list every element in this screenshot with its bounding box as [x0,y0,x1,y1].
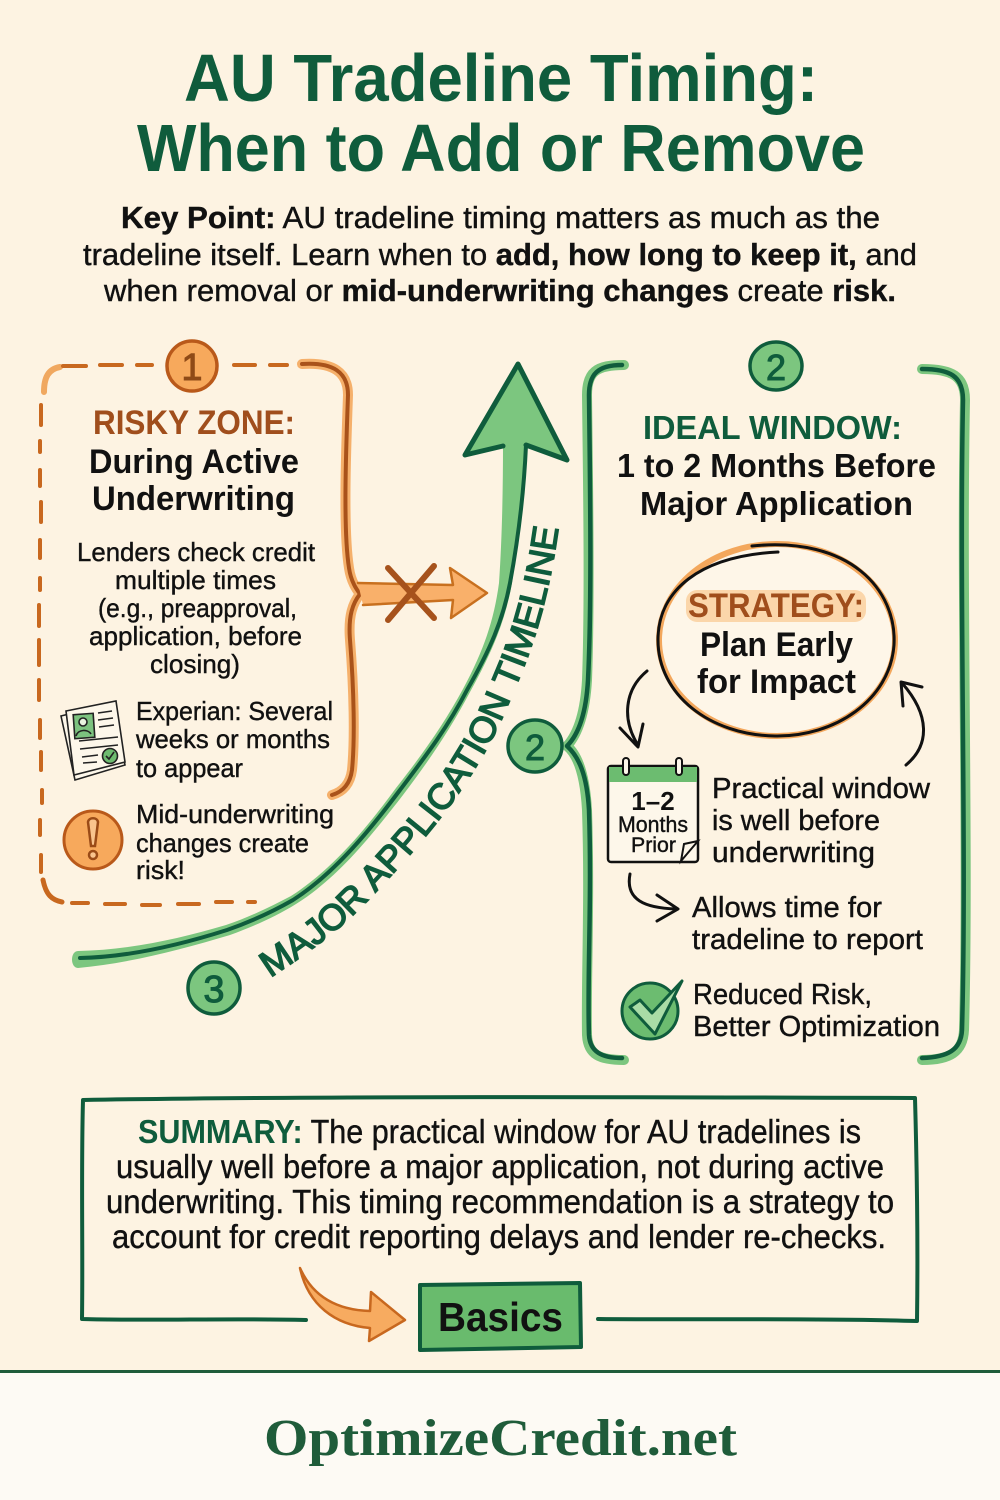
summary text: SUMMARY: The practical window for AU tradelines is [138,1113,861,1150]
allows time text: tradeline to report [692,924,923,956]
ideal window heading: IDEAL WINDOW: [643,409,902,446]
blocked arrow [358,566,487,620]
allows time text [692,892,923,956]
ideal window heading [617,409,936,522]
summary text [106,1113,894,1255]
strategy oval: STRATEGY: [688,587,864,625]
lender checks text: (e.g., preapproval, [98,593,297,623]
right brace of risky zone [302,364,360,795]
icon: number 1 badge: 1 [181,347,203,389]
experian text: weeks or months [135,724,330,754]
experian text: to appear [136,753,243,783]
risky zone heading [89,404,299,518]
footer: OptimizeCredit.net [264,1410,738,1467]
practical window text: is well before [712,805,880,837]
icon: number 3 badge [188,962,240,1014]
lender checks text: multiple times [115,565,276,595]
icon: check mark [622,981,682,1039]
strategy oval: for Impact [697,663,856,701]
summary text: usually well before a major application, not during active [116,1148,884,1185]
timeline arrow [72,364,567,968]
summary border [82,1097,917,1321]
practical window text: underwriting [712,837,875,869]
title [137,41,865,186]
icon: number 3 badge: 3 [203,969,225,1011]
arrow to basics [300,1268,405,1341]
icon: number 2 badge top [750,342,802,390]
key point text: Key Point: AU tradeline timing matters as much as the [121,200,880,235]
title: When to Add or Remove [137,111,865,186]
left brace of ideal window [567,365,624,1060]
experian text [135,696,333,783]
reduced risk text: Better Optimization [693,1011,940,1043]
dashed border of risky zone [39,365,287,905]
icon: calendar: Months [618,812,688,837]
title: AU Tradeline Timing: [184,41,818,116]
risky zone heading: Underwriting [92,480,295,518]
icon: number 2 badge side [508,720,562,772]
strategy oval: Plan Early [700,626,853,664]
icon: credit report document [61,701,125,780]
summary text: underwriting. This timing recommendation is a strategy to [106,1183,894,1220]
risky zone heading: RISKY ZONE: [93,404,295,442]
icon: number 1 badge [167,341,217,391]
arrow: strategy to calendar [620,671,647,747]
key point text [83,200,917,308]
practical window text [712,773,931,869]
panel: risky zone [39,341,360,905]
key point text: tradeline itself. Learn when to add, how long to keep it, and [83,237,917,272]
practical window text: Practical window [712,773,931,805]
experian text: Experian: Several [136,696,333,726]
icon: calendar [608,758,698,862]
strategy oval [658,544,895,736]
timeline label: MAJOR APPLICATION TIMELINE [258,526,560,978]
mid-underwriting text [136,799,334,885]
reduced risk text [693,979,940,1043]
icon: warning exclamation [64,811,122,869]
arrow: calendar to report time [629,874,678,921]
mid-underwriting text: changes create [136,828,309,858]
lender checks text: Lenders check credit [77,537,316,567]
icon: calendar: Prior [631,834,676,857]
lender checks text [77,537,316,679]
risky zone heading: During Active [89,443,299,481]
icon: calendar: 1–2 [631,786,675,816]
icon: number 2 badge side: 2 [525,727,545,768]
ideal window heading: Major Application [640,485,913,522]
arrow: back to strategy [901,682,924,765]
allows time text: Allows time for [692,892,882,924]
lender checks text: application, before [89,621,302,651]
panel: ideal window [508,342,966,1060]
basics badge [420,1283,581,1350]
lender checks text: closing) [150,649,240,679]
panel: summary [82,1097,917,1350]
right brace of ideal window [922,369,966,1060]
mid-underwriting text: risk! [136,855,185,885]
footer [0,1370,1000,1500]
reduced risk text: Reduced Risk, [693,979,872,1011]
basics badge: Basics [438,1294,563,1340]
summary text: account for credit reporting delays and lender re-checks. [112,1218,886,1255]
icon: number 2 badge top: 2 [766,347,786,388]
mid-underwriting text: Mid-underwriting [136,799,334,829]
key point text: when removal or mid-underwriting changes create risk. [103,273,896,308]
ideal window heading: 1 to 2 Months Before [617,447,936,484]
